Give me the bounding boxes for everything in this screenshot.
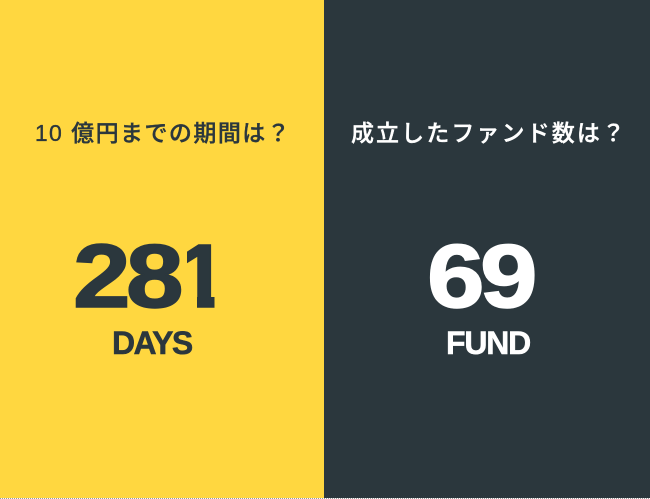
panel: funds established [324,0,650,498]
number: 69: 6 [427,227,485,327]
heading: period to 1 billion yen: 10 億円までの期間は？ [35,120,291,146]
number: 281: 1 [177,227,227,327]
number: 69: 9 [480,227,538,327]
number: 69 [427,227,538,327]
panel: days to 1 billion yen [0,0,324,498]
heading: number of funds established: 成立したファンド数は？ [351,120,627,146]
number: 281 [73,227,214,327]
number: 281: 2 [73,227,131,327]
number: 281: 8 [126,227,184,327]
unit: fund: FUND [446,325,530,361]
unit: days: DAYS [112,325,192,361]
bottom dotted edge [0,498,650,499]
